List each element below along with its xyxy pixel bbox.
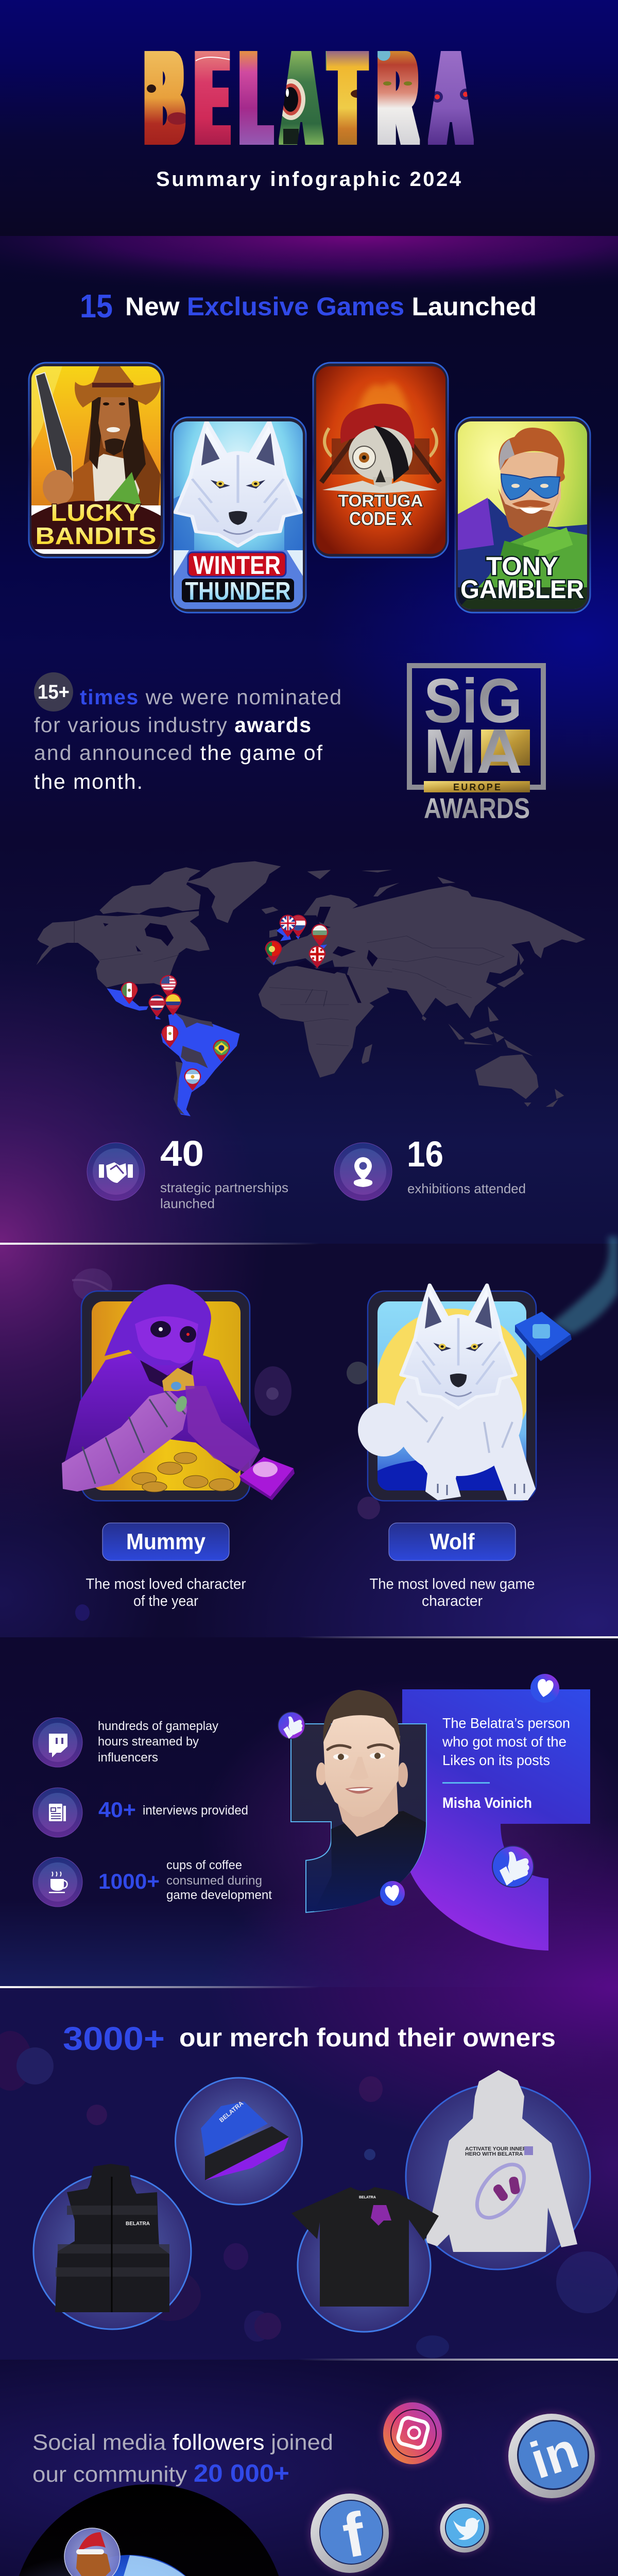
heading: 3000+ merch: our merch found their owners [179,2023,556,2052]
caption: Wolf: character [422,1593,483,1609]
portrait: Misha Voinich [314,1690,426,1911]
merch: puffer vest [33,2164,191,2329]
pin: Colombia [165,993,181,1015]
panel: most liked person [278,1674,590,1951]
game card: Tony Gambler: TONY [486,552,558,581]
stat: 1000+ cups of coffee: cups of coffee [166,1858,242,1872]
caption: Wolf [370,1576,535,1609]
icon: newspaper [33,1788,82,1837]
text: social media followers: Social media followers joined [32,2430,333,2455]
heading: 3000+ merch: 3000+ [63,2020,165,2057]
chip: heart lower [380,1881,405,1906]
character: Mummy [62,1284,295,1501]
icon: linkedin [506,2412,597,2500]
icon: handshake [87,1143,145,1200]
button: Wolf: Wolf [430,1529,475,1554]
text block: award nominations: for various industry awards [34,713,311,737]
stat: 40 strategic partnerships: launched [160,1196,215,1211]
stat: 40 strategic partnerships [87,1133,288,1211]
badge: 15+: 15+ [38,681,70,703]
chip: big thumbs up [492,1846,534,1887]
logo: SiGMA Europe Awards: MA [424,716,522,786]
logo: SiGMA Europe Awards [409,666,543,824]
icon: linkedin: in [524,2421,585,2490]
pin: Brazil [213,1040,230,1062]
pin: UK [279,915,297,937]
merch: t-shirt [291,2187,439,2332]
game card: Lucky Bandits: BANDITS [35,522,157,549]
quote text: Misha Voinich [442,1795,532,1811]
merch: bucket hat [175,2078,302,2205]
merch: bucket hat: BELATRA [218,2099,245,2124]
badge: 15+ [34,672,73,711]
stat: 16 exhibitions: exhibitions attended [407,1181,526,1196]
mummy figure [62,1284,260,1492]
pin: Peru [162,1025,178,1047]
icon: facebook [308,2492,391,2575]
quote text: Likes on its posts [442,1752,550,1768]
text block: award nominations [34,672,341,793]
heading: 15 new exclusive games launched [80,287,537,325]
game card: Winter Thunder: WINTER [193,551,281,580]
stat: 40 strategic partnerships: 40 [160,1133,204,1174]
stat: streamed hours: hours streamed by [98,1735,199,1749]
stat: 1000+ cups of coffee: game development [166,1888,272,1902]
button: Mummy: Mummy [126,1529,205,1554]
icon: twitch [33,1718,82,1767]
merch: hoodie: ACTIVATE YOUR INNER [465,2146,527,2152]
logo: SiGMA Europe Awards: EUROPE [453,782,501,792]
decorative planets and bokeh [72,1268,380,1621]
text block: award nominations: the month. [34,770,143,793]
icon: location pin [334,1143,392,1200]
illustration: globe with characters [0,2484,287,2576]
pin: Bulgaria [311,924,329,946]
game card: Tony Gambler [455,417,590,613]
icon: twitter [438,2502,491,2554]
gold coins [132,1452,234,1492]
merch: t-shirt: BELATRA [359,2196,376,2199]
icon: instagram [382,2400,443,2466]
stat: 40+ interviews: 40+ [98,1798,136,1822]
stat: streamed hours: influencers [98,1751,158,1765]
text: social media followers: our community 20 000+ [32,2460,289,2487]
game card: Tortuga Code X [313,363,448,557]
heading: 3000+ merch [63,2020,556,2057]
stat: 1000+ cups of coffee: consumed during [166,1874,262,1888]
chip: thumbs up [278,1712,306,1739]
stat: streamed hours [33,1718,218,1767]
icon: facebook: f [338,2499,370,2571]
button: Mummy [102,1523,229,1561]
photo frame [291,1724,426,1912]
bokeh [0,2031,618,2358]
game card: Winter Thunder [171,417,306,613]
stat: streamed hours: hundreds of gameplay [98,1719,218,1733]
heading: 15 new exclusive games launched: New Exclusive Games Launched [125,292,537,321]
gem: blue [515,1236,618,1361]
stat: 16 exhibitions [334,1134,526,1200]
stat: 40 strategic partnerships: strategic partnerships [160,1180,288,1195]
game card: Tortuga Code X: CODE X [349,508,412,529]
button: Wolf [389,1523,516,1561]
merch: puffer vest: BELATRA [126,2221,150,2227]
game card: Tony Gambler: GAMBLER [460,575,584,604]
caption: Mummy: of the year [133,1593,198,1609]
world map [37,861,586,1116]
gem: purple [239,1457,295,1500]
pin: Costa Rica [148,994,166,1017]
quote text: The Belatra’s person [442,1715,570,1731]
logo: SiGMA Europe Awards: AWARDS [424,792,530,824]
game card: Lucky Bandits [29,363,164,557]
bubble: bull [64,2528,120,2576]
stat: 40+ interviews [33,1788,248,1837]
caption: Mummy: The most loved character [85,1576,246,1592]
wolf body [358,1352,536,1500]
game card: Winter Thunder: THUNDER [185,578,290,605]
pin: Netherlands [289,915,307,937]
caption: Mummy [85,1576,246,1609]
heading: 15 new exclusive games launched: 15 [80,287,113,325]
logo: BELATRA letters filled with character art [144,51,474,145]
pin: Mexico [121,982,138,1004]
stat: 16 exhibitions: 16 [407,1134,443,1174]
text block: award nominations: times we were nominated [80,685,341,709]
game card: Tortuga Code X: TORTUGA [338,492,423,510]
stat: 1000+ cups of coffee: 1000+ [98,1869,160,1893]
text: social media followers [32,2430,333,2487]
subtitle: Summary infographic 2024 [156,168,461,191]
icon: coffee [33,1857,82,1907]
merch: hoodie [406,2070,590,2269]
caption: Wolf: The most loved new game [370,1576,535,1592]
pin: Georgia [309,946,325,968]
stat: 1000+ cups of coffee [33,1857,272,1907]
quote text [442,1715,570,1811]
logo: SiGMA Europe Awards: SiG [424,666,522,736]
quote text: who got most of the [442,1734,566,1750]
pin: USA [160,975,177,997]
pin: Argentina [184,1069,201,1091]
pin: Portugal [265,941,282,963]
game card: Lucky Bandits: LUCKY [50,499,141,526]
text block: award nominations: and announced the game of [34,741,323,765]
merch: hoodie: HERO WITH BELATRA [465,2151,523,2157]
stat: 40+ interviews: interviews provided [143,1803,248,1818]
chip: heart [530,1674,559,1703]
character: Wolf [347,1236,618,1510]
